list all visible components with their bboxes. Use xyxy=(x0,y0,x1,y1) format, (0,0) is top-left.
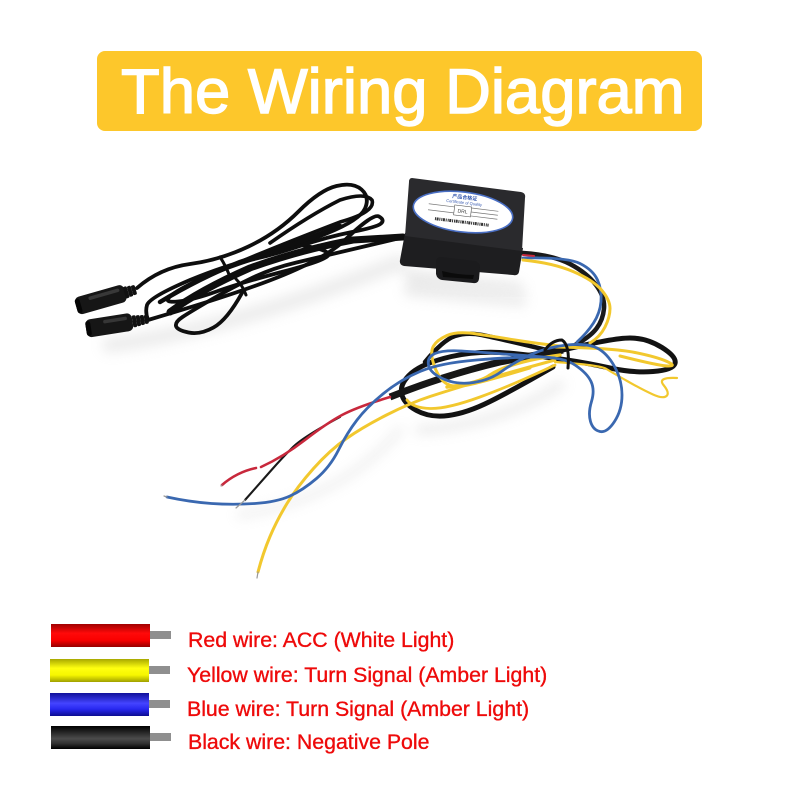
legend row: blue wire: Blue wire: Turn Signal (Amber Light) xyxy=(187,697,529,721)
connector: upper DC plug xyxy=(74,281,138,315)
red lead xyxy=(261,397,390,467)
blue from box xyxy=(523,258,601,342)
colored wire harness xyxy=(167,253,677,572)
box front face xyxy=(400,233,523,275)
box top face xyxy=(405,178,525,251)
legend row: black wire: Black wire: Negative Pole xyxy=(188,730,429,754)
soft shadows under product xyxy=(110,262,560,515)
cable bundle upper strand xyxy=(160,226,340,302)
cable tie one xyxy=(220,257,230,277)
box shadow xyxy=(400,268,528,292)
product photo: black DC cable harness xyxy=(137,185,403,333)
red stub at box xyxy=(523,255,534,256)
cable loop: inner xyxy=(240,196,372,262)
legend row: red wire xyxy=(51,624,454,652)
yellow: upper loop xyxy=(432,333,567,386)
wire tips xyxy=(164,485,258,578)
legend xyxy=(50,624,547,754)
legend row: black wire xyxy=(51,726,429,754)
cable tie two xyxy=(236,279,246,295)
blue long lead and loops xyxy=(167,344,622,504)
wire knot tie xyxy=(545,340,568,368)
certificate label xyxy=(411,186,515,238)
legend row: yellow wire xyxy=(50,659,547,687)
black heat-shrink tube xyxy=(390,350,563,397)
cable loop: lower xyxy=(176,238,400,333)
cable loop: upper xyxy=(137,185,367,302)
legend row: red wire: Red wire: ACC (White Light) xyxy=(188,628,454,652)
connector: lower DC plug xyxy=(85,310,150,338)
black sheath: from box xyxy=(523,253,604,345)
cable loop: middle xyxy=(146,216,383,320)
barcode xyxy=(435,219,489,225)
yellow: right loop xyxy=(555,347,672,366)
yellow: lower loop xyxy=(407,365,555,409)
label subheading: Certificate of Quality xyxy=(446,198,482,207)
title banner xyxy=(97,51,702,131)
mounting tab xyxy=(436,257,480,283)
red lead tip xyxy=(222,468,256,485)
label center box: DRL xyxy=(457,208,468,216)
yellow: long lead xyxy=(258,360,555,572)
label heading: 产品合格证 xyxy=(452,193,478,203)
title text: The Wiring Diagram xyxy=(121,57,685,127)
legend row: blue wire xyxy=(50,693,529,721)
black sheath: upper loop xyxy=(425,334,555,362)
legend row: yellow wire: Yellow wire: Turn Signal (Amber Light) xyxy=(187,663,547,687)
yellow from box xyxy=(523,260,610,343)
black thin lead xyxy=(245,417,340,500)
cable bundle xyxy=(170,237,403,312)
black sheath: right loop and lower loop xyxy=(401,338,675,416)
yellow: lower right curl xyxy=(555,362,677,397)
control box xyxy=(400,178,528,292)
label circuit lines xyxy=(428,203,498,219)
yellow: thick segment xyxy=(447,355,560,387)
